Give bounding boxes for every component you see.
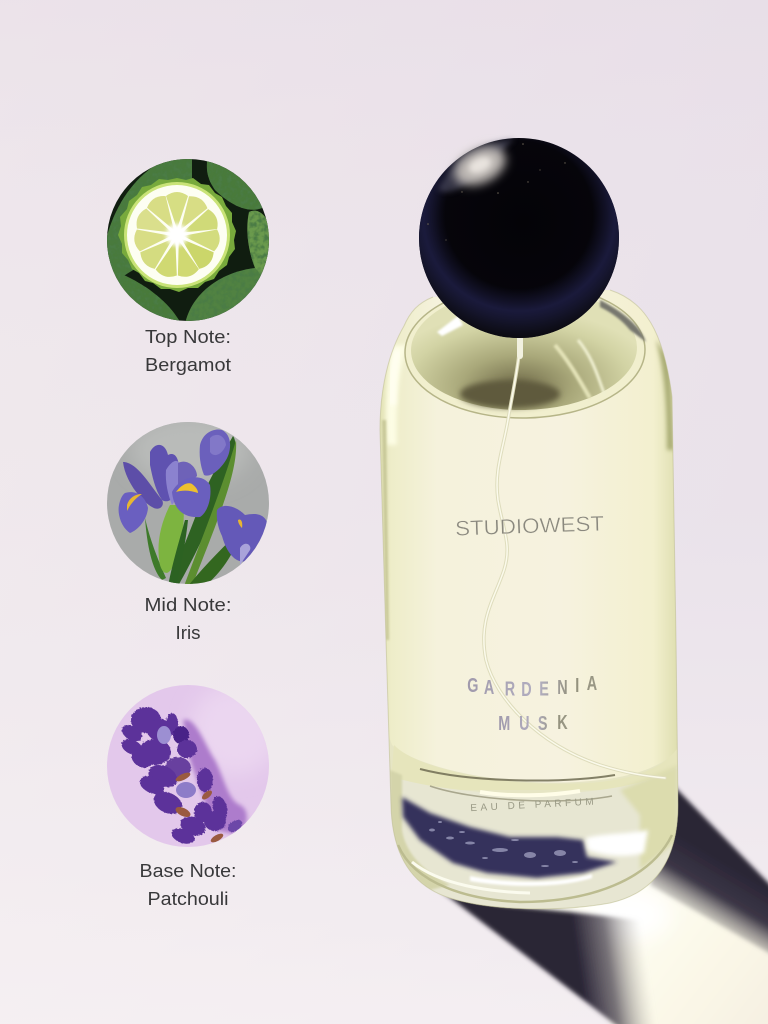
petal shadow: [183, 719, 247, 835]
label: base note: Patchouli: [148, 889, 228, 909]
bottle outline: [380, 290, 678, 909]
label: top note: Top Note:: [145, 327, 231, 347]
cap sphere: [419, 138, 619, 338]
base rim: [398, 835, 672, 902]
cap highlight: [448, 139, 512, 193]
note 3: patchouli: [107, 685, 280, 909]
glass side tint: [390, 770, 450, 890]
label: mid note: Mid Note:: [144, 595, 232, 615]
note 2: iris: [107, 415, 269, 643]
cap matte sheen: [438, 139, 515, 192]
flower buds: [119, 707, 244, 847]
cap speckles: [427, 143, 566, 241]
beam core glow: [586, 889, 670, 941]
image: lavender circle: [107, 685, 280, 847]
side highlights: [386, 345, 408, 445]
liquid meniscus line: [420, 769, 615, 781]
image: bergamot circle: [107, 159, 269, 321]
label: top note: Bergamot: [145, 355, 231, 375]
light beam: [520, 860, 768, 1024]
brand wordmark: STUDIOWEST: [455, 512, 605, 541]
white band under reflection: [470, 874, 592, 886]
pale buds: [157, 726, 171, 744]
product name: GARDENIA: [467, 672, 598, 701]
image: iris circle: [107, 415, 269, 586]
cast shadow and light beam: [440, 780, 768, 1024]
label: base note: [140, 861, 236, 909]
note 1: bergamot: [100, 150, 272, 375]
shadow: right band: [650, 780, 768, 965]
calyx details: [174, 771, 225, 844]
leaves and stems: [145, 518, 166, 580]
mouth well: [404, 297, 646, 419]
label: mid note: Iris: [176, 623, 200, 643]
slice segments: [133, 192, 221, 279]
dark reflection in base: [402, 797, 617, 878]
slice rind: [118, 178, 236, 292]
product name: MUSK: [498, 711, 568, 735]
dark liquid reflection: [460, 380, 560, 408]
label: top note: [145, 327, 231, 375]
liquid: [376, 280, 684, 783]
shadow: lower left band: [440, 890, 680, 1024]
bottle body: [370, 280, 690, 920]
neck glint in base: [480, 791, 580, 795]
bright glint in base: [586, 830, 648, 856]
product name: [467, 672, 598, 735]
engraved base text: EAU DE PARFUM: [470, 797, 596, 814]
label: mid note: [144, 595, 232, 643]
label: base note: Base Note:: [140, 861, 236, 881]
rim glints: [437, 316, 463, 336]
perfume bottle: [370, 138, 690, 920]
clear glass base: [402, 767, 678, 909]
flower petals: [119, 430, 268, 565]
lower liquid band: [394, 746, 677, 756]
spray tube: [484, 338, 665, 778]
